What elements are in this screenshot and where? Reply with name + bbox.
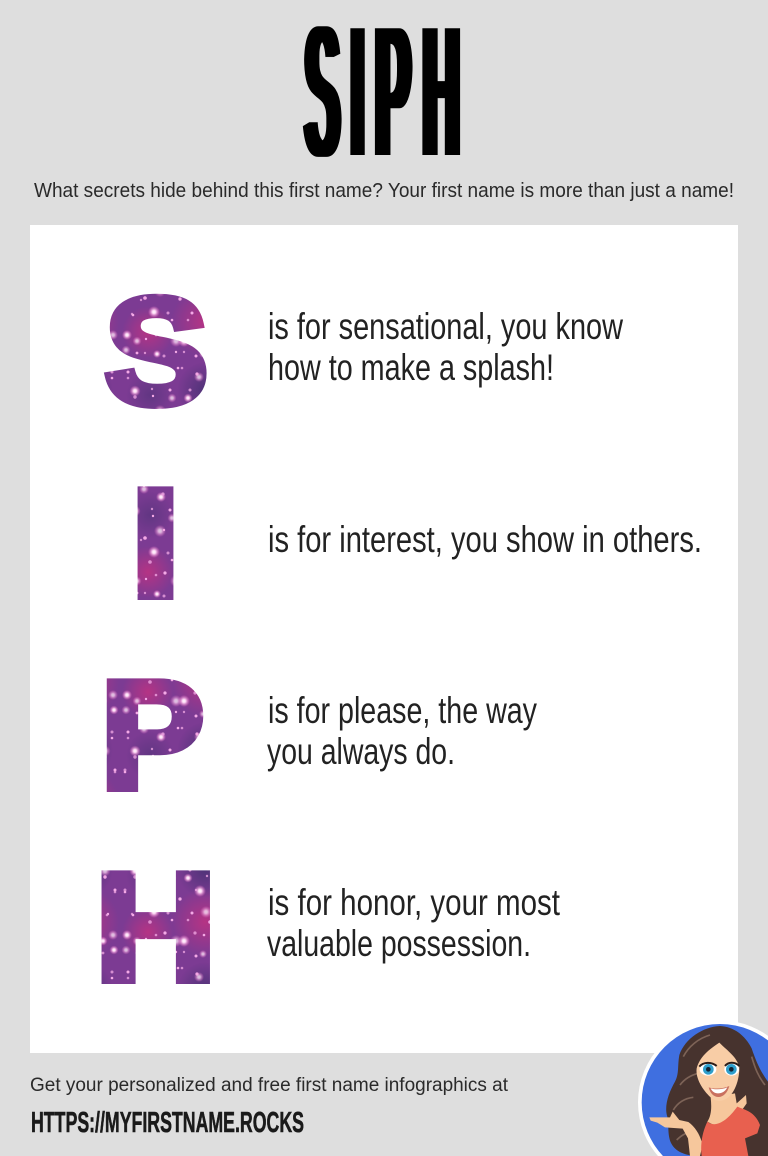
text: S meaning: is for sensational, you know: [268, 306, 623, 347]
text: P meaning: you always do.: [267, 731, 455, 772]
text: P meaning: [267, 690, 537, 772]
row: letter I: [131, 458, 702, 628]
row: letter P: [101, 650, 537, 820]
avatar hair: [666, 1026, 768, 1156]
text: H meaning: is for honor, your most: [268, 882, 561, 923]
text: S meaning: [268, 306, 623, 388]
avatar top: [701, 1107, 760, 1156]
row: letter S: [105, 267, 623, 435]
panel: letter meanings: [30, 225, 738, 1053]
text: S meaning: how to make a splash!: [268, 347, 554, 388]
footer url: HTTPS://MYFIRSTNAME.ROCKS: [31, 1107, 304, 1139]
avatar eyes: [699, 1063, 739, 1076]
galaxy letter I: I: [131, 458, 180, 628]
row: letter H: [95, 842, 561, 1012]
text: H meaning: [267, 882, 561, 964]
galaxy letter P: P: [101, 650, 204, 820]
avatar: [638, 1020, 768, 1156]
galaxy letter H: H: [95, 842, 216, 1012]
avatar face: [697, 1043, 739, 1101]
footer text: Get your personalized and free first name infographics at: [30, 1075, 509, 1096]
avatar neck and arm: [649, 1093, 747, 1156]
galaxy letter S: S: [105, 267, 208, 435]
subtitle: What secrets hide behind this first name? Your first name is more than just a name!: [34, 180, 734, 202]
text: H meaning: valuable possession.: [267, 923, 531, 964]
avatar mouth: [709, 1086, 729, 1097]
text: P meaning: is for please, the way: [268, 690, 537, 731]
